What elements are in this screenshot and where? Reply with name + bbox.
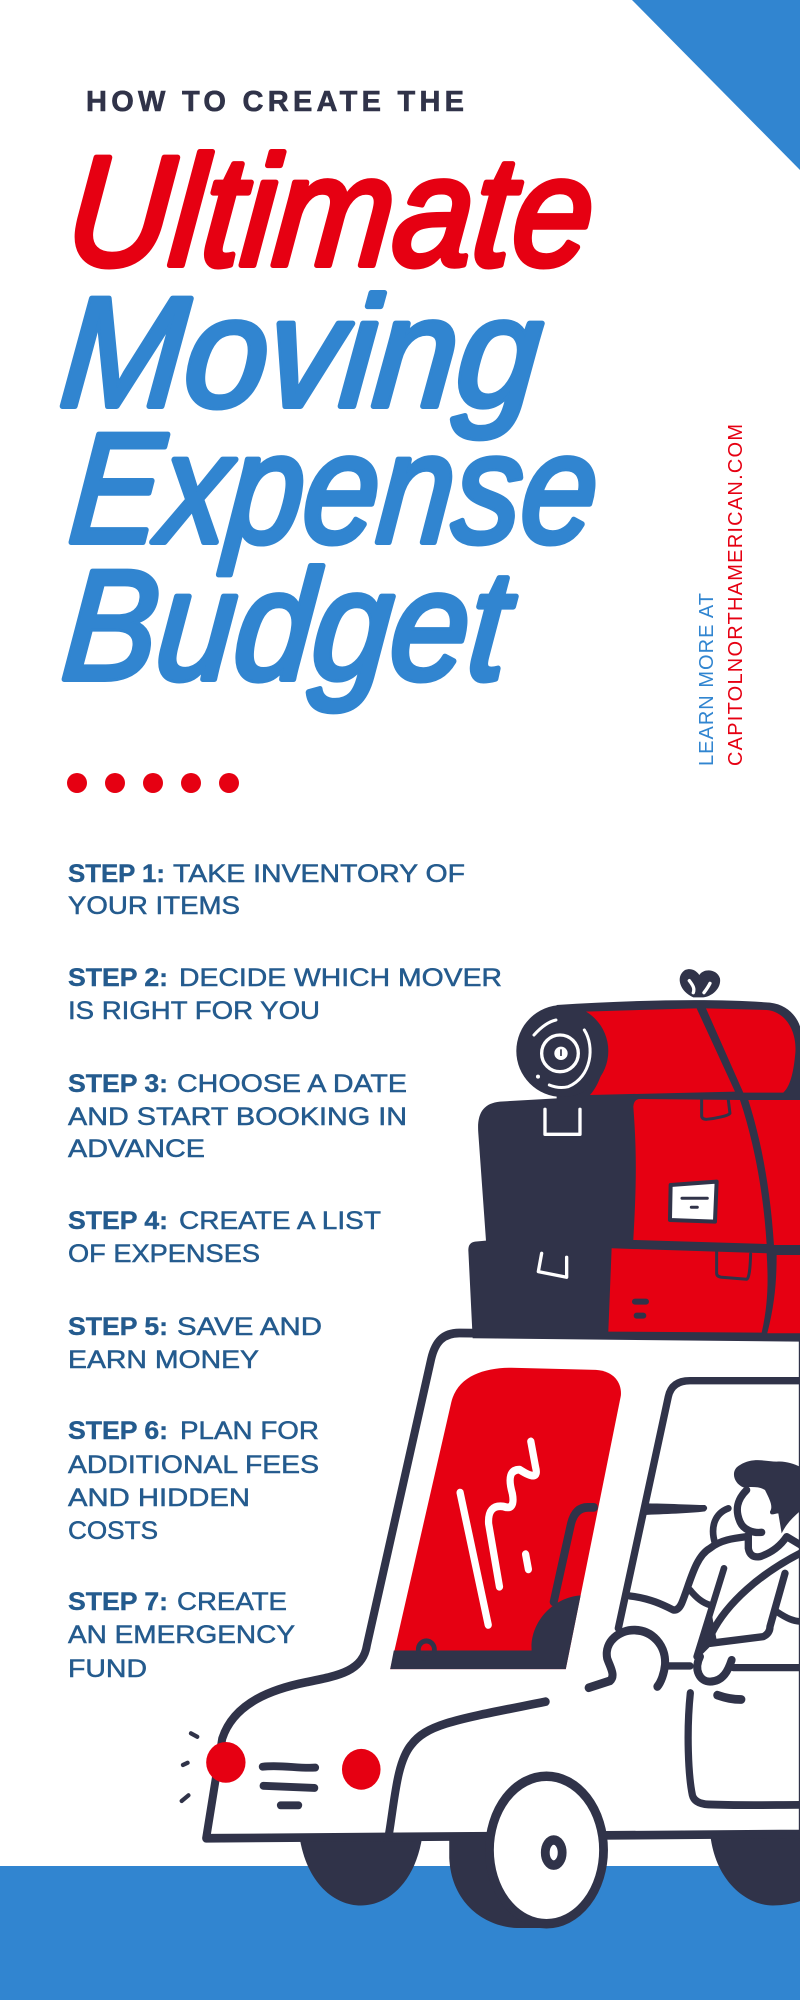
box tag upper (545, 1109, 580, 1134)
seat and shoulder line (630, 1537, 747, 1610)
step 5: STEP 5: (68, 1313, 168, 1341)
grille lines (262, 1766, 315, 1805)
step 7: STEP 7: (68, 1588, 168, 1616)
roll end (516, 1005, 608, 1097)
upper box red right (748, 1100, 800, 1245)
side wheel tire (449, 1836, 576, 1928)
step 6: PLAN FOR (180, 1417, 319, 1445)
car body outline (206, 1333, 800, 1838)
red tab lower (717, 1252, 751, 1279)
rolled mat red right (706, 1008, 796, 1093)
strap bow (680, 969, 720, 997)
title line: Budget: Budget (57, 539, 521, 713)
step 1 (68, 860, 465, 920)
rear tire (710, 1836, 800, 1905)
step 7 (68, 1588, 295, 1683)
wheel hub (545, 1840, 562, 1865)
title line: Expense: Expense (64, 402, 605, 576)
step 3: AND START BOOKING IN (68, 1103, 407, 1131)
car body and wheels (182, 1333, 800, 1928)
rolled mat red (585, 1008, 735, 1095)
step 2: IS RIGHT FOR YOU (68, 997, 320, 1025)
window dash (526, 1554, 528, 1569)
window frame (618, 1381, 800, 1628)
box tag lower (538, 1253, 567, 1277)
luggage on roof (468, 969, 800, 1342)
step 3: CHOOSE A DATE (177, 1070, 407, 1098)
sleeve (690, 1590, 710, 1605)
step 3: STEP 3: (68, 1070, 168, 1098)
step 1: TAKE INVENTORY OF (173, 860, 465, 888)
headrest (713, 1508, 728, 1543)
step 5: EARN MONEY (68, 1346, 259, 1374)
roll spiral (534, 1020, 590, 1087)
box dots (635, 1302, 646, 1316)
window sill (390, 1595, 581, 1669)
red tab upper (702, 1100, 730, 1119)
step 1: STEP 1: (68, 860, 165, 888)
seat belt (712, 1552, 800, 1633)
driver and cabin (618, 1381, 800, 1682)
belt wedge (695, 1613, 717, 1662)
title line: Moving: Moving (55, 266, 548, 440)
step 6: AND HIDDEN (68, 1484, 250, 1512)
window knob (418, 1641, 434, 1658)
label lines (682, 1198, 707, 1207)
rear arm (777, 1612, 800, 1622)
title line: Ultimate: Ultimate (61, 125, 601, 299)
front tire (299, 1836, 422, 1905)
dashboard lines (668, 1666, 800, 1668)
step 7: FUND (68, 1655, 147, 1683)
step 5 (68, 1313, 322, 1374)
steps list (68, 860, 502, 1683)
seat back line (554, 1507, 594, 1602)
window reflection lines (460, 1493, 488, 1625)
bottom blue band (0, 1866, 800, 2000)
corner triangle (632, 0, 800, 170)
window squiggle (489, 1441, 536, 1587)
step 7: CREATE (177, 1588, 287, 1616)
step 5: SAVE AND (177, 1313, 322, 1341)
vertical text: website: CAPITOLNORTHAMERICAN.COM (725, 424, 747, 766)
step 7: AN EMERGENCY (68, 1621, 295, 1649)
title (55, 125, 605, 713)
red dots row (67, 773, 239, 793)
door handle dash (717, 1695, 741, 1699)
step 2 (68, 964, 502, 1025)
subtitle: HOW TO CREATE THE (86, 86, 464, 118)
side wheel (489, 1776, 604, 1924)
step 4: OF EXPENSES (68, 1240, 260, 1268)
lower box red left (608, 1248, 768, 1333)
box label (670, 1182, 717, 1222)
step 4: CREATE A LIST (179, 1207, 381, 1235)
hand on wheel (697, 1657, 732, 1682)
step 6: ADDITIONAL FEES (68, 1451, 319, 1479)
arm (697, 1568, 724, 1657)
lower box red right (767, 1255, 800, 1333)
step 6: COSTS (68, 1517, 158, 1545)
car illustration (182, 969, 800, 1928)
car door (688, 1693, 800, 1805)
step 2: STEP 2: (68, 964, 168, 992)
step 3: ADVANCE (68, 1135, 205, 1163)
torso (710, 1573, 785, 1643)
bow highlights (689, 981, 710, 993)
headlight front (206, 1742, 246, 1783)
step 4: STEP 4: (68, 1207, 168, 1235)
neck and collar (748, 1535, 800, 1557)
step 2: DECIDE WHICH MOVER (179, 964, 502, 992)
step 3 (68, 1070, 407, 1163)
fender line (389, 1702, 546, 1834)
light sparks (182, 1733, 197, 1801)
vertical text: learn more: LEARN MORE AT (696, 593, 718, 766)
upper box red left (633, 1099, 767, 1244)
red side window (390, 1368, 621, 1669)
step 4 (68, 1207, 381, 1268)
headlight side (342, 1749, 381, 1790)
hair (734, 1460, 800, 1533)
luggage silhouette (468, 1000, 800, 1342)
step 1: YOUR ITEMS (68, 892, 240, 920)
step 6 (68, 1417, 319, 1545)
mirror bar (643, 1503, 707, 1515)
step 6: STEP 6: (68, 1417, 168, 1445)
face outline (737, 1490, 762, 1532)
steering wheel arch (589, 1630, 665, 1688)
